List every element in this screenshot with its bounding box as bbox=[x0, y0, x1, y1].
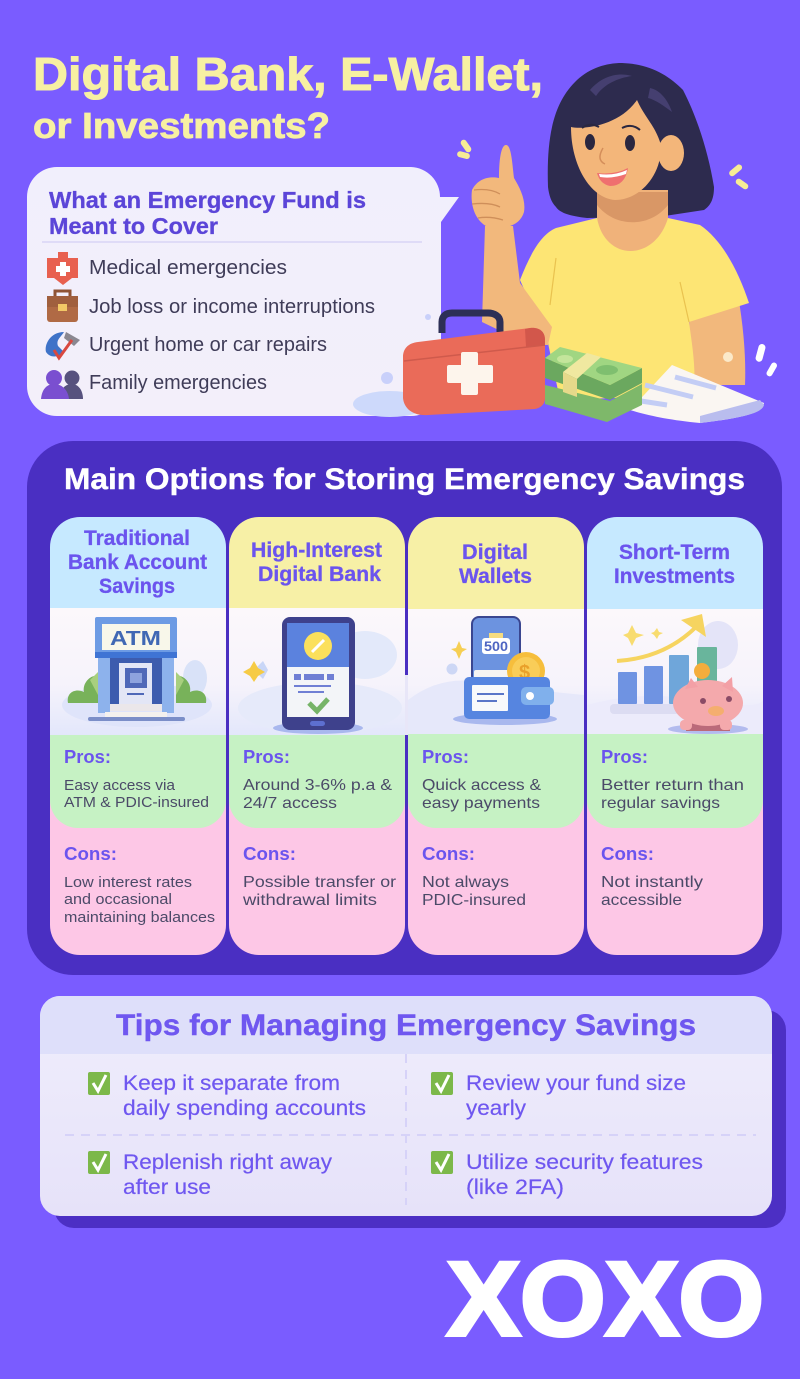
icon: wallet, phone and coin: 500 bbox=[484, 638, 508, 654]
first aid kit bbox=[442, 313, 500, 333]
left arm and hand bbox=[482, 226, 552, 345]
cons bbox=[242, 844, 397, 909]
illustration: woman giving thumbs up bbox=[456, 63, 778, 400]
panel: what an emergency fund covers bbox=[27, 167, 459, 416]
cons: and occasional bbox=[64, 892, 172, 908]
pros: Around 3-6% p.a & bbox=[243, 777, 392, 794]
pros: ATM & PDIC-insured bbox=[64, 795, 209, 811]
card: short-term investments bbox=[587, 517, 763, 955]
tip: security features: Utilize security features bbox=[466, 1151, 703, 1174]
notebook bbox=[630, 365, 764, 423]
card title bbox=[459, 541, 532, 588]
card title: Traditional bbox=[84, 527, 190, 550]
pros: Pros: bbox=[64, 747, 111, 767]
cons: Possible transfer or bbox=[243, 874, 397, 891]
cons: Not instantly bbox=[601, 874, 703, 891]
tip: review yearly bbox=[431, 1072, 686, 1120]
tip: security features: (like 2FA) bbox=[466, 1176, 564, 1199]
icon: family bbox=[41, 370, 83, 399]
pros: Better return than bbox=[601, 777, 744, 794]
tip: replenish: Replenish right away bbox=[123, 1151, 333, 1174]
cash stacks bbox=[545, 384, 642, 422]
neck bbox=[597, 190, 668, 254]
cons: maintaining balances bbox=[64, 910, 215, 926]
item: medical emergencies: Medical emergencies bbox=[89, 257, 287, 279]
tip: review yearly: Review your fund size bbox=[466, 1072, 686, 1095]
icon: phone with banking app bbox=[238, 617, 402, 734]
card title: Wallets bbox=[459, 565, 532, 588]
card title: Bank Account bbox=[68, 551, 207, 574]
pros bbox=[64, 747, 209, 811]
pros: regular savings bbox=[601, 795, 720, 812]
pros: Quick access & bbox=[422, 777, 541, 794]
icon: ATM building: ATM bbox=[110, 628, 161, 650]
card title bbox=[68, 527, 207, 598]
tip: keep separate: Keep it separate from bbox=[123, 1072, 340, 1095]
cons: accessible bbox=[601, 892, 682, 909]
card title bbox=[614, 541, 735, 588]
logo: XOXO: XOXO bbox=[447, 1241, 764, 1358]
cons: Cons: bbox=[243, 844, 296, 864]
title bbox=[33, 48, 543, 146]
icon: briefcase bbox=[47, 291, 78, 322]
shirt bbox=[520, 218, 749, 400]
icon: wallet, phone and coin: $ bbox=[519, 662, 530, 684]
cons: Cons: bbox=[601, 844, 654, 864]
sparkle marks bbox=[456, 139, 749, 190]
title: Digital Bank, E-Wallet, bbox=[33, 48, 543, 100]
panel heading: Main Options for Storing Emergency Savings bbox=[64, 463, 745, 496]
icon: medical bbox=[47, 252, 78, 285]
title: or Investments? bbox=[33, 105, 330, 146]
tip: review yearly: yearly bbox=[466, 1097, 527, 1120]
card title: Savings bbox=[99, 575, 175, 598]
cons: Cons: bbox=[422, 844, 475, 864]
pros bbox=[243, 747, 392, 812]
icon: growth chart and piggy bank bbox=[587, 614, 763, 734]
icon: tools bbox=[46, 332, 80, 358]
icon: wallet, phone and coin bbox=[408, 616, 584, 734]
cons: Low interest rates bbox=[64, 875, 192, 891]
panel heading bbox=[49, 187, 366, 239]
tip: security features bbox=[431, 1151, 703, 1199]
pros: Pros: bbox=[243, 747, 290, 767]
cons bbox=[601, 844, 703, 909]
panel: tips bbox=[40, 996, 786, 1228]
icon: ATM building bbox=[62, 617, 212, 727]
pros: easy payments bbox=[422, 795, 540, 812]
cons bbox=[422, 844, 526, 909]
item: urgent repairs: Urgent home or car repairs bbox=[89, 334, 327, 356]
right arm bbox=[689, 295, 745, 385]
illustration: first-aid kit, cash and notebook bbox=[353, 313, 764, 423]
cons: withdrawal limits bbox=[242, 892, 377, 909]
card title: Investments bbox=[614, 565, 735, 588]
tip: replenish: after use bbox=[123, 1176, 211, 1199]
pros: Pros: bbox=[422, 747, 469, 767]
cons bbox=[64, 844, 215, 926]
pros: Pros: bbox=[601, 747, 648, 767]
card title: Digital bbox=[462, 541, 528, 564]
card title: High-Interest bbox=[251, 539, 382, 562]
pros: Easy access via bbox=[64, 778, 176, 794]
panel heading: What an Emergency Fund is bbox=[49, 187, 366, 213]
card: digital wallets bbox=[405, 517, 584, 955]
cons: PDIC-insured bbox=[422, 892, 526, 909]
card: traditional bank bbox=[50, 517, 226, 955]
pros bbox=[422, 747, 541, 812]
tip: keep separate bbox=[88, 1072, 366, 1120]
cons: Cons: bbox=[64, 844, 117, 864]
panel: main options bbox=[27, 441, 782, 975]
tip: replenish bbox=[88, 1151, 333, 1199]
cons: Not always bbox=[422, 874, 509, 891]
card: digital bank bbox=[229, 517, 405, 955]
pros: 24/7 access bbox=[243, 795, 337, 812]
card title bbox=[251, 539, 382, 586]
item: job loss: Job loss or income interruptions bbox=[89, 296, 375, 318]
panel heading: Tips for Managing Emergency Savings bbox=[116, 1009, 696, 1042]
panel heading: Meant to Cover bbox=[49, 213, 218, 239]
item: family emergencies: Family emergencies bbox=[89, 372, 267, 394]
face bbox=[571, 100, 661, 200]
tip: keep separate: daily spending accounts bbox=[123, 1097, 366, 1120]
card title: Digital Bank bbox=[258, 563, 381, 586]
pros bbox=[601, 747, 744, 812]
card title: Short-Term bbox=[619, 541, 730, 564]
